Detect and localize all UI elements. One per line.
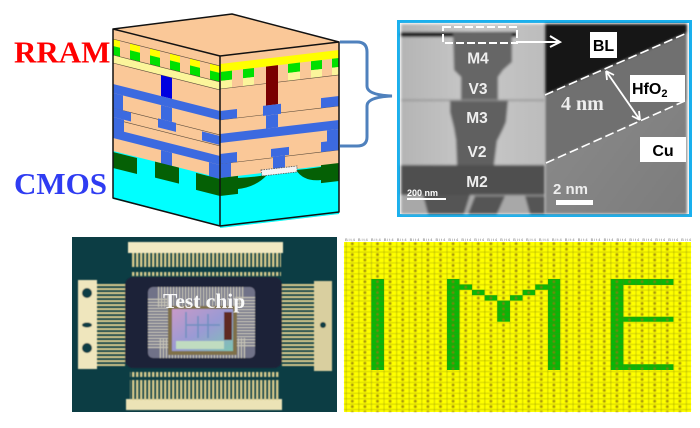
scale bar 2 nm: 2 nm [553,181,588,198]
cube top face [113,14,339,56]
label: RRAM: RRAM [14,34,110,70]
layer labels: V3 [469,81,488,98]
bottom lead frame [126,399,282,410]
double arrow: thickness [606,71,640,120]
label: BL: BL [593,38,614,55]
bracket [340,42,392,146]
letter M [447,279,560,370]
right lead frame [314,281,332,371]
scale bar 200 nm [407,188,446,200]
interface dashes [545,33,687,163]
label: HfO2 [630,75,685,102]
TEM left image [401,24,545,214]
zoom box [443,27,517,43]
layer labels: M4 [467,50,489,68]
gate [261,166,297,176]
label: 4 nm: 4 nm [561,93,604,115]
letter I [371,279,384,370]
yellow cells [344,242,691,412]
label: HfO2: HfO [632,81,661,98]
label: Cu [640,137,686,162]
top lead frame [128,242,283,253]
label: BL [590,32,617,58]
label: Cu: Cu [652,143,674,160]
cavity [148,287,255,358]
layer labels: V2 [468,144,486,161]
layer labels: M2 [466,174,488,191]
cell grid [344,242,691,412]
panel: IME bit map [344,237,692,412]
scale bar 200 nm: 200 nm [407,188,438,198]
panel: test chip photo [72,237,337,412]
cube outlines [113,14,339,226]
label: HfO2: 2 [661,88,667,100]
layer labels [466,50,489,191]
cube right face [220,42,339,228]
TEM right image [545,24,687,214]
letter E [611,279,674,370]
panel: TEM cross-section [398,22,690,216]
3D stack cube diagram [113,14,339,228]
layer labels: M3 [466,110,488,127]
scale bar 2 nm [553,181,593,205]
cube left face [113,29,220,226]
die [168,306,237,355]
left lead frame [78,280,97,369]
column headers: Bit4 Bit4 Bit4 Bit4 Bit4 Bit4 Bit4 Bit4 Bit4 Bit4 Bit4 Bit4 Bit4 Bit4 Bit4 Bit4 Bit4 Bit4 Bit4 Bit4 Bit4 Bit4 Bit4 Bit4 Bit4 Bit4 Bit4 [345,237,692,242]
label: CMOS: CMOS [14,166,107,201]
zoom arrow [518,36,560,47]
ceramic package [125,277,282,368]
label: Test chip: Test chip [163,289,245,313]
transistor wells [238,167,321,189]
